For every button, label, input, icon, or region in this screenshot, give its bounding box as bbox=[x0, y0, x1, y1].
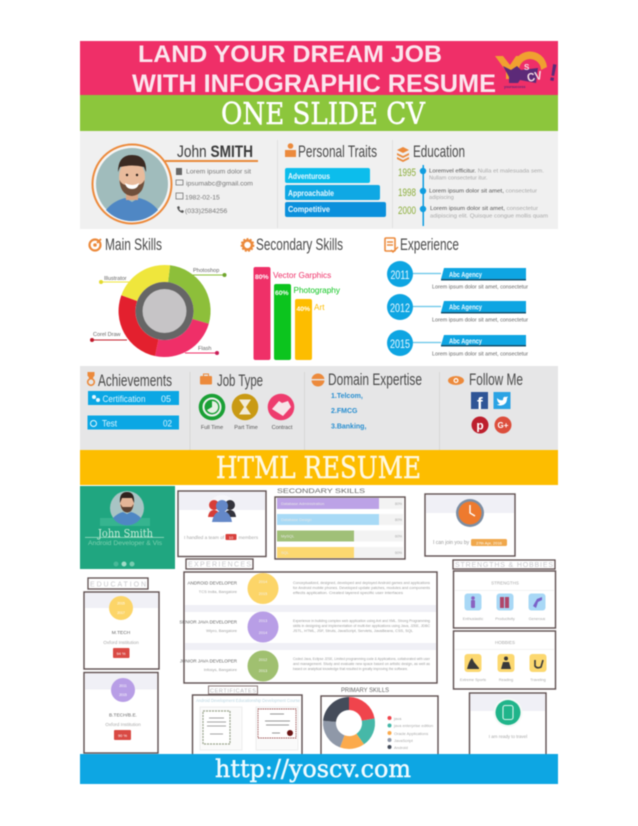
label: experiences: EXPERIENCES bbox=[188, 562, 251, 568]
footer: website url: http://yoscv.com bbox=[215, 755, 411, 783]
card: work experience list: Conceptualized, designed, developed and deployed Android games and applications bbox=[293, 580, 430, 585]
trait bars: Adventurous bbox=[288, 172, 330, 181]
chart: primary skills donut: Oracle Applications bbox=[394, 731, 428, 736]
label: experiences bbox=[186, 559, 253, 569]
achievement bars: 02 bbox=[163, 418, 172, 428]
card: education m.tech: 2017 bbox=[117, 611, 125, 615]
bar chart: secondary skills: 40% bbox=[296, 306, 310, 313]
education timeline: Loremvel efficitur. Nulla et malesuada sem. bbox=[429, 168, 544, 174]
title banner: WITH INFOGRAPHIC RESUME bbox=[132, 70, 496, 98]
card: work experience list: 2013 bbox=[259, 619, 267, 623]
card: education b.tech: 2011 bbox=[119, 684, 127, 688]
chart: secondary skills bars: Database Administration bbox=[281, 501, 324, 506]
chart: primary skills donut: java bbox=[393, 716, 402, 721]
achievement bars: Certification bbox=[102, 394, 146, 404]
title banner: LAND YOUR DREAM JOB bbox=[138, 41, 442, 68]
domain list: 3.Banking, bbox=[331, 424, 366, 430]
card: join date: I can join you by bbox=[433, 540, 470, 546]
heading: achievements bbox=[88, 371, 172, 390]
chart: secondary skills bars: Database Design bbox=[281, 517, 312, 522]
card: education m.tech: 2015 bbox=[117, 602, 125, 606]
domain list: 1.Telcom, bbox=[331, 393, 363, 400]
heading: main skills bbox=[90, 235, 162, 254]
heading: html resume: HTML RESUME bbox=[216, 451, 421, 486]
education timeline: 2000 bbox=[398, 205, 416, 217]
card: team: 10 bbox=[229, 535, 234, 540]
donut chart: main skills: Illustrator bbox=[104, 276, 127, 282]
card: education b.tech: B.TECH/B.E. bbox=[109, 712, 137, 718]
logo: YoSCV: ! bbox=[547, 59, 560, 87]
donut chart: main skills bbox=[90, 265, 226, 357]
donut chart: main skills: Corel Draw bbox=[93, 332, 121, 338]
card: education m.tech: 94 % bbox=[116, 651, 126, 656]
donut chart: main skills: Flash bbox=[198, 346, 211, 352]
bar chart: secondary skills: Art bbox=[314, 303, 325, 312]
card: work experience list: 2012 bbox=[259, 658, 267, 662]
heading: job type bbox=[200, 371, 263, 390]
card: strengths: Generous bbox=[529, 617, 545, 621]
domain list bbox=[331, 393, 366, 430]
card: hobbies bbox=[454, 631, 556, 689]
heading: personal traits: Personal Traits bbox=[298, 142, 377, 161]
social icons bbox=[471, 392, 512, 434]
card: team bbox=[178, 491, 266, 556]
experience timeline: 2015 bbox=[390, 337, 410, 351]
logo: YoSCV: CV bbox=[526, 68, 543, 85]
card: work experience list: JSTL, HTML, JSF, Struts, JavaScript, Servlets, JavaBeans, CSS, SQL bbox=[293, 628, 414, 633]
label: education: EDUCATION bbox=[90, 582, 146, 588]
experience timeline: Abc Agency bbox=[449, 336, 483, 346]
card: hobbies: Extreme Sports bbox=[460, 678, 486, 682]
footer: website url bbox=[80, 754, 558, 784]
experience timeline: Abc Agency bbox=[449, 302, 483, 312]
name: John SMITH bbox=[177, 142, 253, 161]
heading: follow me: Follow Me bbox=[469, 370, 523, 389]
heading: html resume bbox=[80, 450, 558, 486]
heading: domain expertise: Domain Expertise bbox=[328, 370, 422, 389]
experience timeline: 2012 bbox=[390, 301, 410, 315]
label: education bbox=[88, 578, 148, 589]
portrait photo bbox=[92, 144, 172, 224]
card: work experience list: Experience in building complex web application using Ant and XML. Strong Programming bbox=[293, 618, 430, 623]
bar chart: secondary skills: 60% bbox=[275, 290, 289, 297]
education timeline: adipiscing elit. Quisque congue mollis quam bbox=[430, 214, 548, 220]
social icons: G+ bbox=[498, 421, 509, 430]
card: work experience list: 2013 bbox=[259, 669, 267, 673]
trait bars: Competitive bbox=[288, 205, 330, 214]
card: work experience list: Infosys, Bangalore bbox=[204, 667, 238, 672]
heading: follow me bbox=[448, 370, 523, 389]
job type icons: Full Time bbox=[201, 425, 223, 431]
label: strengths and hobbies: STRENGTHS & HOBBIES bbox=[455, 562, 553, 569]
experience timeline: Lorem ipsum dolor sit amet, consectetur bbox=[432, 318, 528, 324]
education timeline: 1998 bbox=[398, 187, 416, 199]
card: join date: 27th Apr, 2016 bbox=[476, 540, 503, 546]
card: education b.tech bbox=[84, 672, 158, 753]
donut chart: main skills: Photoshop bbox=[193, 268, 219, 274]
card: work experience list: ANDROID DEVELOPER bbox=[187, 580, 238, 586]
heading: experience: Experience bbox=[400, 235, 459, 254]
bar chart: secondary skills: Photography bbox=[294, 286, 341, 295]
card: education b.tech: Oxford Institution bbox=[105, 722, 141, 727]
card: hobbies: HOBBIES bbox=[495, 640, 515, 645]
heading: one slide cv bbox=[80, 95, 558, 132]
profile card: Android Developer & Vis bbox=[88, 541, 162, 547]
chart: primary skills donut: java enterprise edition bbox=[393, 723, 433, 728]
chart: secondary skills bars: MySQL bbox=[281, 534, 295, 538]
chart: secondary skills bars bbox=[275, 488, 405, 559]
heading: secondary skills: Secondary Skills bbox=[256, 235, 343, 254]
contact details: (033)2584256 bbox=[185, 208, 228, 215]
education timeline: adipiscing bbox=[429, 195, 454, 201]
card: team: I handled a team of bbox=[184, 535, 225, 540]
card: hobbies: Traveling bbox=[530, 678, 546, 682]
panel: achievements, job type, domain, follow bbox=[80, 366, 558, 450]
chart: primary skills donut bbox=[321, 687, 438, 757]
card: ready to travel bbox=[470, 693, 546, 755]
trait bars bbox=[285, 168, 386, 217]
job type icons: Part Time bbox=[234, 425, 258, 431]
social icons: p bbox=[476, 418, 484, 432]
card: education m.tech: M.TECH bbox=[112, 630, 131, 636]
chart: primary skills donut: Android bbox=[394, 745, 408, 750]
chart: secondary skills bars: 60% bbox=[395, 551, 402, 555]
social icons: f bbox=[477, 394, 483, 413]
card: team: members bbox=[238, 535, 259, 540]
heading: main skills: Main Skills bbox=[105, 235, 162, 254]
card: work experience list: Coded Java, Eclipse J2SE, Limited programming code & Applications, collaborated with user bbox=[293, 656, 431, 661]
card: work experience list: for Android mobile phones. Developed update patches, modules and components bbox=[293, 585, 430, 590]
heading: one slide cv: ONE SLIDE CV bbox=[221, 97, 426, 132]
card: work experience list: and management. Study and evaluate new space based on artistic design, as well as bbox=[293, 661, 430, 666]
card: education m.tech bbox=[84, 592, 159, 669]
experience timeline: Lorem ipsum dolor sit amet, consectetur bbox=[432, 284, 528, 290]
card: strengths: Productivity bbox=[495, 617, 515, 621]
job type icons: Contract bbox=[272, 425, 293, 431]
achievement bars: Test bbox=[102, 418, 117, 428]
card: work experience list: TCS India, Bangalore bbox=[199, 589, 238, 594]
bar chart: secondary skills: Vector Garphics bbox=[273, 271, 331, 280]
panel: profile, traits, education bbox=[80, 131, 558, 229]
card: work experience list bbox=[179, 572, 437, 683]
heading: domain expertise bbox=[312, 370, 422, 389]
trait bars: Approachable bbox=[288, 189, 334, 198]
card: certificates: Android Development Educationship Development Course bbox=[196, 698, 301, 703]
heading: achievements: Achievements bbox=[98, 371, 172, 390]
card: education b.tech: 2015 bbox=[119, 693, 127, 697]
chart: secondary skills bars: 80% bbox=[395, 518, 402, 522]
achievement bars: 05 bbox=[161, 394, 171, 404]
contact details bbox=[176, 168, 253, 215]
chart: primary skills donut: JavaScript bbox=[394, 738, 414, 743]
card: work experience list: 2014 bbox=[259, 631, 267, 635]
bar chart: secondary skills: 80% bbox=[255, 274, 269, 281]
education timeline: Lorem ipsum dolor sit amet, consectetur bbox=[430, 206, 538, 212]
card: ready to travel: I am ready to travel bbox=[489, 734, 527, 739]
chart: primary skills donut: PRIMARY SKILLS bbox=[341, 687, 389, 694]
job type icons bbox=[199, 394, 294, 431]
heading: experience bbox=[385, 235, 459, 254]
heading: education: Education bbox=[413, 142, 465, 161]
experience timeline: 2011 bbox=[390, 268, 410, 282]
card: join date bbox=[425, 494, 515, 556]
profile card: John Smith bbox=[97, 527, 153, 540]
chart: secondary skills bars: 80% bbox=[395, 502, 402, 506]
card: work experience list: skills in designing and implementation of multi-tier applications using Java, J2EE, JDBC bbox=[293, 623, 430, 628]
education timeline: 1995 bbox=[398, 167, 416, 179]
card: work experience list: 2015 bbox=[259, 592, 267, 596]
chart: secondary skills bars: SQL bbox=[281, 550, 290, 555]
experience timeline: Abc Agency bbox=[449, 270, 483, 279]
chart: secondary skills bars: 60% bbox=[395, 534, 402, 538]
heading: secondary skills bbox=[241, 235, 343, 254]
heading: personal traits bbox=[285, 142, 377, 161]
card: education b.tech: 90 % bbox=[118, 733, 127, 738]
card: work experience list: 2014 bbox=[259, 580, 267, 584]
card: education m.tech: Oxford Institution bbox=[103, 640, 139, 645]
logo: YoSCV bbox=[495, 51, 560, 89]
bar chart: secondary skills bbox=[254, 267, 341, 360]
card: work experience list: based on analytical knowledge that resulted in greatly improving the software. bbox=[293, 666, 408, 671]
experience timeline: Lorem ipsum dolor sit amet, consectetur bbox=[432, 352, 528, 358]
contact details: 1982-02-15 bbox=[185, 194, 220, 202]
achievement bars bbox=[88, 391, 179, 430]
domain list: 2.FMCG bbox=[331, 408, 358, 415]
education timeline: Lorem ipsum dolor sit amet, consectetur bbox=[429, 188, 537, 194]
logo: YoSCV: yoursuccess bbox=[504, 85, 525, 89]
card: strengths bbox=[454, 571, 556, 628]
label: certificates: CERTIFICATES bbox=[210, 688, 256, 694]
experience timeline bbox=[387, 261, 528, 358]
title banner bbox=[80, 41, 558, 98]
card: work experience list: Wipro, Bangalore bbox=[206, 628, 238, 633]
contact details: ipsumabc@gmail.com bbox=[186, 180, 253, 188]
card: work experience list: JUNIOR JAVA DEVELOPER bbox=[180, 658, 238, 664]
heading: job type: Job Type bbox=[217, 371, 263, 390]
logo: YoSCV: S bbox=[524, 63, 530, 72]
card: strengths: STRENGTHS bbox=[491, 580, 519, 586]
card: hobbies: Reading bbox=[499, 678, 513, 682]
profile card bbox=[80, 486, 175, 569]
card: strengths: Enthusiastic bbox=[463, 617, 483, 621]
card: work experience list: SENIOR JAVA DEVELOPER bbox=[179, 620, 238, 624]
chart: secondary skills bars: SECONDARY SKILLS bbox=[277, 488, 365, 495]
contact details: Lorem ipsum dolor sit bbox=[186, 168, 251, 176]
heading: education bbox=[397, 142, 465, 162]
label: certificates bbox=[208, 686, 258, 694]
education timeline: Nullam consectetur itur. bbox=[429, 176, 488, 182]
card: certificates bbox=[192, 695, 302, 757]
education timeline bbox=[398, 165, 548, 226]
card: work experience list: effects application. Created layered specific user interfaces bbox=[293, 590, 403, 595]
